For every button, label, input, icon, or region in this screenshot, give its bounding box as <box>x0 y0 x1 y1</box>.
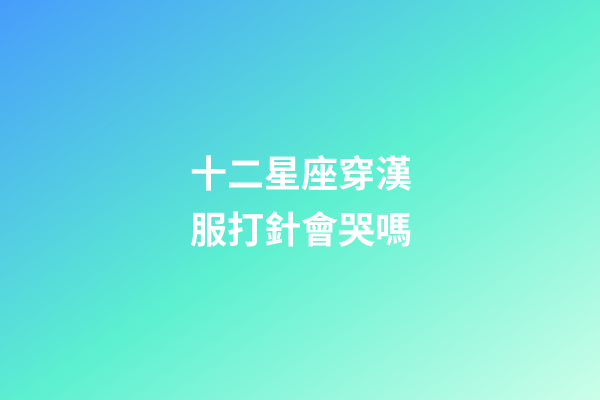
title <box>190 154 412 251</box>
title line 1: 十二星座穿漢 <box>190 154 412 195</box>
title line 2: 服打針會哭嗎 <box>190 210 412 251</box>
